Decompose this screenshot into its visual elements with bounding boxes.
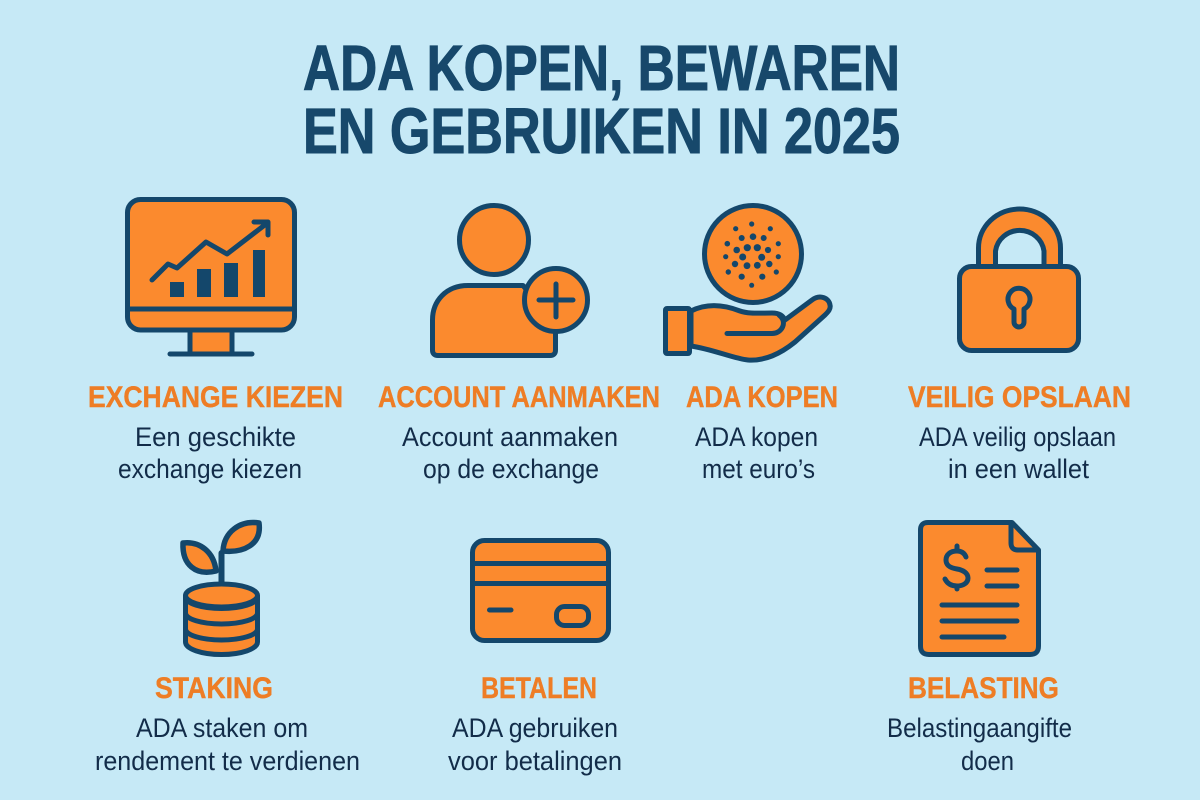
description: exchange kiezen (118, 422, 302, 484)
title (303, 32, 900, 167)
panel: belasting (887, 522, 1072, 776)
description: ada kopen (695, 422, 818, 484)
icon: hand holding ADA coin (666, 206, 830, 360)
description: belasting: Belastingaangifte (887, 713, 1072, 743)
label: betalen: BETALEN (481, 672, 597, 705)
icon: tax document (920, 522, 1038, 654)
label: belasting: BELASTING (908, 672, 1059, 705)
label: exchange kiezen: EXCHANGE KIEZEN (88, 381, 343, 414)
description: belasting (887, 713, 1072, 776)
panel: account aanmaken (378, 206, 660, 484)
panel: betalen (448, 540, 622, 776)
description: ada kopen: met euro’s (702, 454, 815, 484)
title: ADA KOPEN, BEWAREN (303, 32, 900, 104)
panel: exchange kiezen (88, 200, 343, 484)
description: veilig opslaan: ADA veilig opslaan (919, 422, 1116, 452)
description: belasting: doen (961, 746, 1014, 776)
icon: padlock (960, 209, 1078, 350)
description: veilig opslaan (919, 422, 1116, 484)
description: account aanmaken: op de exchange (423, 454, 599, 484)
label: ada kopen: ADA KOPEN (686, 381, 838, 414)
label: staking: STAKING (155, 672, 273, 705)
description: betalen: ADA gebruiken (452, 713, 618, 743)
label: account aanmaken: ACCOUNT AANMAKEN (378, 381, 660, 414)
title: EN GEBRUIKEN IN 2025 (303, 95, 900, 167)
icon: payment card (472, 540, 608, 640)
description: betalen (448, 713, 622, 776)
panel: ada kopen (666, 206, 838, 484)
panel: veilig opslaan (908, 209, 1131, 484)
description: veilig opslaan: in een wallet (948, 454, 1089, 484)
description: betalen: voor betalingen (448, 746, 622, 776)
description: exchange kiezen: exchange kiezen (118, 454, 302, 484)
icon: user with plus (432, 206, 588, 356)
description: staking: rendement te verdienen (95, 746, 360, 776)
label: veilig opslaan: VEILIG OPSLAAN (908, 381, 1131, 414)
description: ada kopen: ADA kopen (695, 422, 818, 452)
icon: monitor with rising chart (128, 200, 294, 354)
description: account aanmaken: Account aanmaken (402, 422, 618, 452)
description: exchange kiezen: Een geschikte (135, 422, 296, 452)
description: staking (95, 713, 360, 776)
panel: staking (95, 523, 360, 776)
description: account aanmaken (402, 422, 618, 484)
description: staking: ADA staken om (136, 713, 308, 743)
icon: coin stack with sprout (183, 523, 259, 654)
